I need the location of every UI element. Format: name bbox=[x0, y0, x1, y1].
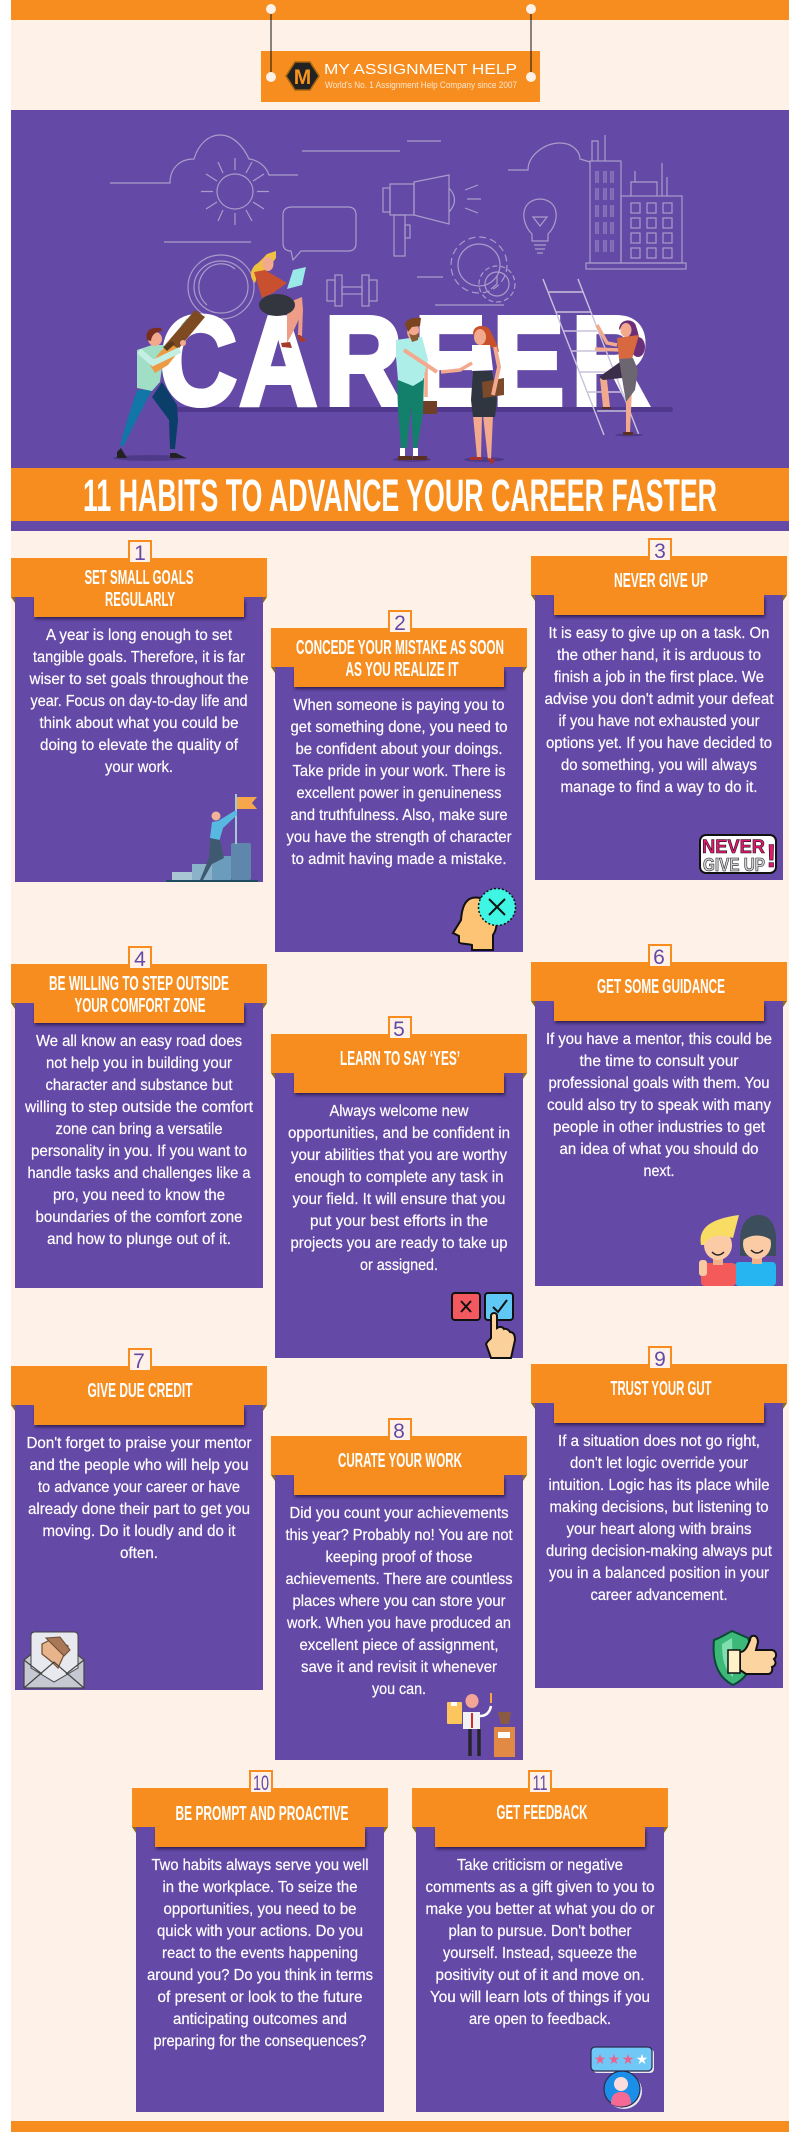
body text 2: you have the strength of character bbox=[286, 829, 512, 846]
heading 4: BE WILLING TO STEP OUTSIDE bbox=[49, 973, 229, 995]
body text 2: be confident about your doings. bbox=[296, 741, 502, 758]
body text 6 bbox=[546, 1031, 772, 1180]
body text 2: get something done, you need to bbox=[290, 719, 508, 736]
title band bbox=[11, 468, 789, 521]
number badge 2: 2 bbox=[394, 612, 406, 635]
body text 6: professional goals with them. You bbox=[548, 1075, 770, 1092]
person: woman on ladder bbox=[595, 320, 645, 436]
body text 4: and how to plunge out of it. bbox=[47, 1231, 231, 1248]
logo sign: M bbox=[294, 66, 311, 89]
person: man shaking hands bbox=[393, 318, 437, 462]
heading 10: BE PROMPT AND PROACTIVE bbox=[176, 1803, 348, 1825]
body text 6: If you have a mentor, this could be bbox=[546, 1031, 772, 1048]
heading 7: GIVE DUE CREDIT bbox=[88, 1380, 192, 1402]
body text 9: If a situation does not go right, bbox=[558, 1433, 760, 1450]
body text 3: finish a job in the first place. We bbox=[554, 669, 764, 686]
icon: head with X bbox=[453, 888, 516, 950]
heading 2: AS YOU REALIZE IT bbox=[346, 659, 458, 681]
body text 5: your field. It will ensure that you bbox=[292, 1191, 506, 1208]
number badge 10 bbox=[250, 1771, 272, 1795]
number badge 1 bbox=[129, 541, 151, 565]
body text 7: Don't forget to praise your mentor bbox=[26, 1435, 252, 1452]
panel: habit 1 bbox=[11, 541, 267, 882]
number badge 8 bbox=[389, 1419, 411, 1443]
body text 10: preparing for the consequences? bbox=[154, 2033, 367, 2050]
icon: star rating bubble and user bbox=[591, 2047, 654, 2109]
line art: clouds, sun, megaphone, bulb, gears, buildings bbox=[110, 135, 686, 319]
body text 7: often. bbox=[120, 1545, 158, 1562]
body text 4: zone can bring a versatile bbox=[56, 1121, 223, 1138]
ladder bbox=[543, 279, 639, 435]
body text 7: moving. Do it loudly and do it bbox=[42, 1523, 236, 1540]
body text 5: or assigned. bbox=[360, 1257, 438, 1274]
body text 4: pro, you need to know the bbox=[53, 1187, 225, 1204]
number badge 9 bbox=[649, 1347, 671, 1371]
body text 8: you can. bbox=[372, 1681, 426, 1698]
body text 11: are open to feedback. bbox=[469, 2011, 611, 2028]
ribbon header 10 bbox=[132, 1788, 388, 1849]
body text 5: put your best efforts in the bbox=[310, 1213, 488, 1230]
body text 9: don't let logic override your bbox=[570, 1455, 749, 1472]
body text 3: if you have not exhausted your bbox=[558, 713, 760, 730]
body text 9: during decision-making always put bbox=[546, 1543, 773, 1560]
icon: envelope with handshake bbox=[24, 1632, 84, 1688]
heading 8: CURATE YOUR WORK bbox=[338, 1450, 462, 1472]
body text 4: personality in you. If you want to bbox=[31, 1143, 247, 1160]
body text 6: the time to consult your bbox=[580, 1053, 739, 1070]
icon: never give up badge: GIVE UP bbox=[703, 855, 765, 875]
icon: star rating bubble and user: ★ bbox=[594, 2052, 606, 2068]
body text 6: next. bbox=[644, 1163, 674, 1180]
body text 3: It is easy to give up on a task. On bbox=[548, 625, 770, 642]
panel: habit 2 bbox=[271, 611, 527, 952]
body text 1: wiser to set goals throughout the bbox=[29, 671, 249, 688]
icon: two friends bbox=[699, 1215, 776, 1286]
person: man with plank bbox=[113, 310, 205, 461]
heading 2 bbox=[296, 637, 504, 681]
number badge 9: 9 bbox=[654, 1348, 666, 1371]
panel: habit 6 bbox=[531, 945, 787, 1286]
body text 10: in the workplace. To seize the bbox=[162, 1879, 358, 1896]
top orange bar bbox=[11, 0, 789, 20]
body text 11: You will learn lots of things if you bbox=[430, 1989, 650, 2006]
ribbon header 7 bbox=[11, 1366, 267, 1427]
number badge 6: 6 bbox=[653, 946, 665, 969]
heading 4: YOUR COMFORT ZONE bbox=[74, 995, 206, 1017]
body text 7: and the people who will help you bbox=[30, 1457, 248, 1474]
ribbon header 3 bbox=[531, 556, 787, 617]
bottom orange bar bbox=[11, 2121, 789, 2132]
ribbon header 6 bbox=[531, 962, 787, 1023]
body text 11 bbox=[426, 1857, 655, 2028]
heading 1: REGULARLY bbox=[105, 589, 175, 611]
body text 2: When someone is paying you to bbox=[294, 697, 505, 714]
body text 8: keeping proof of those bbox=[326, 1549, 473, 1566]
number badge 7 bbox=[129, 1349, 151, 1373]
ribbon header 1 bbox=[11, 558, 267, 619]
number badge 5 bbox=[389, 1017, 411, 1041]
body text 6: people in other industries to get bbox=[553, 1119, 766, 1136]
body text 5 bbox=[288, 1103, 510, 1274]
body text 11: comments as a gift given to you to bbox=[426, 1879, 655, 1896]
number badge 11: 11 bbox=[532, 1772, 548, 1795]
ribbon header 4 bbox=[11, 964, 267, 1025]
body text 2: to admit having made a mistake. bbox=[292, 851, 506, 868]
ribbon header 9 bbox=[531, 1364, 787, 1425]
person: woman shaking hands bbox=[441, 326, 504, 465]
body text 4 bbox=[24, 1033, 254, 1248]
body text 2 bbox=[286, 697, 512, 868]
body text 1: your work. bbox=[105, 759, 173, 776]
body text 4: not help you in building your bbox=[46, 1055, 233, 1072]
heading 9: TRUST YOUR GUT bbox=[610, 1378, 712, 1400]
ribbon header 2 bbox=[271, 628, 527, 689]
body text 3: do something, you will always bbox=[561, 757, 757, 774]
number badge 8: 8 bbox=[393, 1420, 405, 1443]
panel: habit 3 bbox=[531, 539, 787, 880]
body text 1: think about what you could be bbox=[40, 715, 239, 732]
body text 11: make you better at what you do or bbox=[426, 1901, 655, 1918]
body text 9: career advancement. bbox=[590, 1587, 728, 1604]
body text 1: doing to elevate the quality of bbox=[40, 737, 239, 754]
number badge 1: 1 bbox=[134, 542, 146, 565]
heading 2: CONCEDE YOUR MISTAKE AS SOON bbox=[296, 637, 504, 659]
body text 1: tangible goals. Therefore, it is far bbox=[33, 649, 246, 666]
body text 3: advise you don't admit your defeat bbox=[544, 691, 774, 708]
body text 4: handle tasks and challenges like a bbox=[28, 1165, 251, 1182]
body text 5: opportunities, and be confident in bbox=[288, 1125, 510, 1142]
heading 3: NEVER GIVE UP bbox=[614, 570, 708, 592]
body text 5: enough to complete any task in bbox=[294, 1169, 504, 1186]
logo sign: World's No. 1 Assignment Help Company since 2007 bbox=[325, 80, 517, 90]
body text 5: your abilities that you are worthy bbox=[291, 1147, 507, 1164]
body text 3: options yet. If you have decided to bbox=[546, 735, 772, 752]
panel: habit 4 bbox=[11, 947, 267, 1288]
big word: CAREER: CAREER bbox=[159, 290, 649, 431]
number badge 5: 5 bbox=[393, 1018, 405, 1041]
panel: habit 11 bbox=[412, 1771, 668, 2112]
body text 9: your heart along with brains bbox=[566, 1521, 752, 1538]
icon: star rating bubble and user: ★ bbox=[622, 2052, 634, 2068]
number badge 3 bbox=[649, 539, 671, 563]
icon: star rating bubble and user: ★ bbox=[636, 2052, 648, 2068]
body text 10: around you? Do you think in terms bbox=[147, 1967, 373, 1984]
body text 8: achievements. There are countless bbox=[286, 1571, 512, 1588]
heading 4 bbox=[49, 973, 229, 1017]
body text 5: projects you are ready to take up bbox=[290, 1235, 508, 1252]
body text 4: willing to step outside the comfort bbox=[24, 1099, 254, 1116]
body text 3 bbox=[544, 625, 774, 796]
icon: cross, check and pointing hand bbox=[452, 1293, 515, 1358]
body text 8: places where you can store your bbox=[292, 1593, 506, 1610]
body text 11: plan to pursue. Don't bother bbox=[448, 1923, 632, 1940]
icon: shield and thumbs up bbox=[714, 1631, 776, 1685]
body text 8: save it and revisit it whenever bbox=[301, 1659, 498, 1676]
icon: never give up badge: ! bbox=[766, 838, 777, 874]
number badge 3: 3 bbox=[654, 540, 666, 563]
body text 7: to advance your career or have bbox=[38, 1479, 240, 1496]
body text 1 bbox=[29, 627, 249, 776]
body text 8: this year? Probably no! You are not bbox=[286, 1527, 513, 1544]
person: woman sitting on letters bbox=[251, 251, 307, 348]
ground shadow bbox=[162, 407, 673, 412]
icon: man presenting with podium bbox=[447, 1693, 515, 1757]
body text 9: intuition. Logic has its place while bbox=[548, 1477, 770, 1494]
panel: habit 10 bbox=[132, 1771, 388, 2112]
body text 1: A year is long enough to set bbox=[46, 627, 233, 644]
body text 8: excellent piece of assignment, bbox=[300, 1637, 498, 1654]
body text 10: Two habits always serve you well bbox=[152, 1857, 368, 1874]
body text 11: yourself. Instead, squeeze the bbox=[443, 1945, 637, 1962]
body text 9 bbox=[546, 1433, 773, 1604]
heading 1: SET SMALL GOALS bbox=[84, 567, 194, 589]
number badge 6 bbox=[649, 945, 671, 969]
body text 8: Did you count your achievements bbox=[290, 1505, 508, 1522]
body text 11: Take criticism or negative bbox=[457, 1857, 623, 1874]
panel: habit 7 bbox=[11, 1349, 267, 1690]
ribbon header 11 bbox=[412, 1788, 668, 1849]
body text 4: boundaries of the comfort zone bbox=[36, 1209, 243, 1226]
body text 10: react to the events happening bbox=[162, 1945, 358, 1962]
number badge 2 bbox=[389, 611, 411, 635]
panel: habit 8 bbox=[271, 1419, 527, 1760]
body text 1: year. Focus on day-to-day life and bbox=[30, 693, 248, 710]
number badge 4: 4 bbox=[134, 948, 146, 971]
body text 3: manage to find a way to do it. bbox=[560, 779, 758, 796]
ribbon header 8 bbox=[271, 1436, 527, 1497]
panel: habit 5 bbox=[271, 1017, 527, 1358]
body text 7: already done their part to get you bbox=[28, 1501, 250, 1518]
heading 11: GET FEEDBACK bbox=[496, 1802, 588, 1824]
body text 11: positivity out of it and move on. bbox=[436, 1967, 644, 1984]
body text 8: work. When you have produced an bbox=[286, 1615, 511, 1632]
panel: habit 9 bbox=[531, 1347, 787, 1688]
number badge 10: 10 bbox=[253, 1772, 269, 1795]
icon: never give up badge: NEVER bbox=[702, 837, 765, 858]
body text 4: character and substance but bbox=[46, 1077, 233, 1094]
body text 6: could also try to speak with many bbox=[547, 1097, 771, 1114]
body text 8 bbox=[286, 1505, 513, 1698]
body text 4: We all know an easy road does bbox=[36, 1033, 242, 1050]
number badge 4 bbox=[129, 947, 151, 971]
heading 5: LEARN TO SAY ‘YES’ bbox=[340, 1048, 460, 1070]
icon: star rating bubble and user: ★ bbox=[608, 2052, 620, 2068]
hero panel bbox=[11, 110, 789, 531]
body text 9: making decisions, but listening to bbox=[550, 1499, 769, 1516]
ribbon header 5 bbox=[271, 1034, 527, 1095]
body text 7 bbox=[26, 1435, 252, 1562]
body text 10: anticipating outcomes and bbox=[173, 2011, 347, 2028]
logo sign: MY ASSIGNMENT HELP bbox=[324, 61, 517, 78]
body text 10: opportunities, you need to be bbox=[164, 1901, 357, 1918]
body text 10: quick with your actions. Do you bbox=[157, 1923, 363, 1940]
body text 9: you in a balanced position in your bbox=[549, 1565, 770, 1582]
number badge 7: 7 bbox=[133, 1350, 145, 1373]
icon: never give up badge bbox=[700, 835, 777, 875]
logo sign bbox=[261, 4, 540, 102]
body text 2: Take pride in your work. There is bbox=[292, 763, 506, 780]
body text 2: excellent power in genuineness bbox=[296, 785, 502, 802]
body text 10 bbox=[147, 1857, 373, 2050]
body text 3: the other hand, it is arduous to bbox=[557, 647, 761, 664]
body text 6: an idea of what you should do bbox=[560, 1141, 759, 1158]
body text 2: and truthfulness. Also, make sure bbox=[290, 807, 508, 824]
icon: climbing to flag bbox=[166, 794, 258, 882]
body text 5: Always welcome new bbox=[330, 1103, 469, 1120]
body text 10: of present or look to the future bbox=[158, 1989, 363, 2006]
heading 1 bbox=[84, 567, 194, 611]
